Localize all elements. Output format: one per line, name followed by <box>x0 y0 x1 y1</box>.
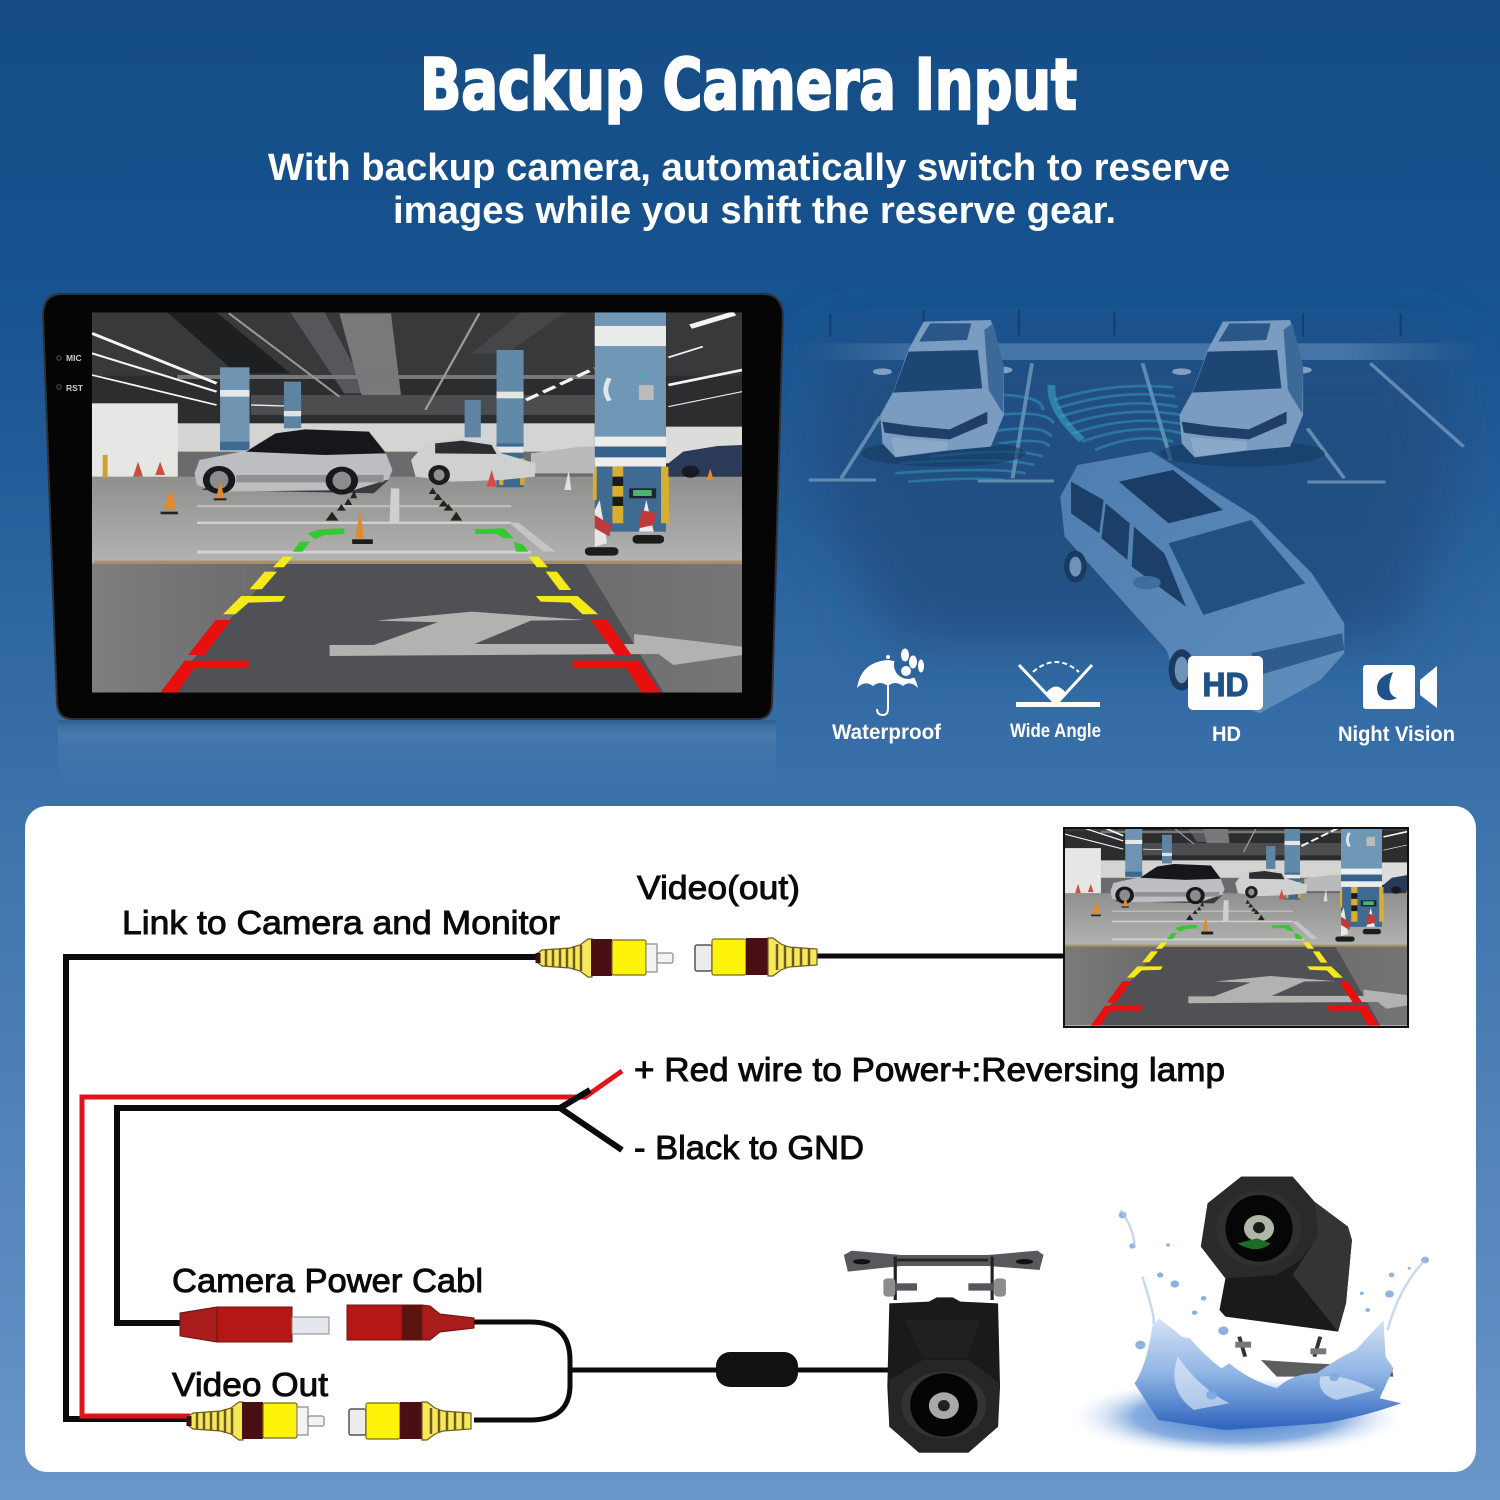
wire: camera cable <box>474 1322 892 1420</box>
feature labels: Waterproof <box>832 720 942 744</box>
icon: waterproof <box>857 648 924 715</box>
panel: parking lot illustration <box>800 310 1480 713</box>
wire: video cable to monitor <box>66 957 537 1419</box>
subtitle: images while you shift the reserve gear. <box>393 190 1116 232</box>
icon: night vision <box>1363 665 1437 709</box>
connector: female RCA bottom <box>349 1402 471 1440</box>
panel: wiring diagram <box>25 792 1476 1472</box>
tablet reflection <box>58 720 776 792</box>
camera: waterproof splash <box>1065 1177 1429 1458</box>
tablet buttons: RST <box>66 383 84 393</box>
wiring labels: Video(out) <box>637 869 800 906</box>
wire: video out to screen <box>817 954 1066 958</box>
tablet buttons: MIC <box>66 353 82 363</box>
panel: tablet monitor <box>43 294 783 792</box>
wire: black ground <box>117 1090 622 1323</box>
subtitle <box>268 147 1230 232</box>
connector: red power female <box>347 1305 474 1340</box>
camera: front view with bracket <box>844 1251 1044 1453</box>
wiring labels: + Red wire to Power+:Reversing lamp <box>634 1051 1225 1088</box>
feature labels <box>832 720 1455 746</box>
subtitle: With backup camera, automatically switch to reserve <box>268 147 1230 189</box>
wire inline module <box>716 1352 798 1387</box>
tablet buttons <box>57 353 84 393</box>
rear camera view on screen <box>92 312 742 693</box>
tablet frame <box>43 294 783 719</box>
wiring labels: Camera Power Cabl <box>172 1262 483 1299</box>
wiring labels: Video Out <box>172 1366 328 1403</box>
icon: wide angle <box>1016 662 1100 707</box>
wire: red power <box>82 1071 622 1416</box>
icon: HD <box>1188 656 1263 710</box>
icon: HD: HD <box>1202 666 1248 703</box>
feature labels: HD <box>1212 722 1241 746</box>
title: Backup Camera Input <box>420 44 1077 126</box>
feature labels: Night Vision <box>1338 722 1455 746</box>
wiring labels <box>122 869 1225 1403</box>
connector: male RCA top <box>538 939 673 977</box>
connector: male RCA bottom <box>189 1402 324 1440</box>
wiring labels: - Black to GND <box>634 1129 864 1166</box>
feature labels: Wide Angle <box>1010 720 1101 742</box>
thumbnail: rear camera view <box>1063 827 1409 1028</box>
wiring labels: Link to Camera and Monitor <box>122 904 560 941</box>
connector: female RCA top <box>695 938 817 976</box>
connector: red power male <box>180 1307 329 1342</box>
